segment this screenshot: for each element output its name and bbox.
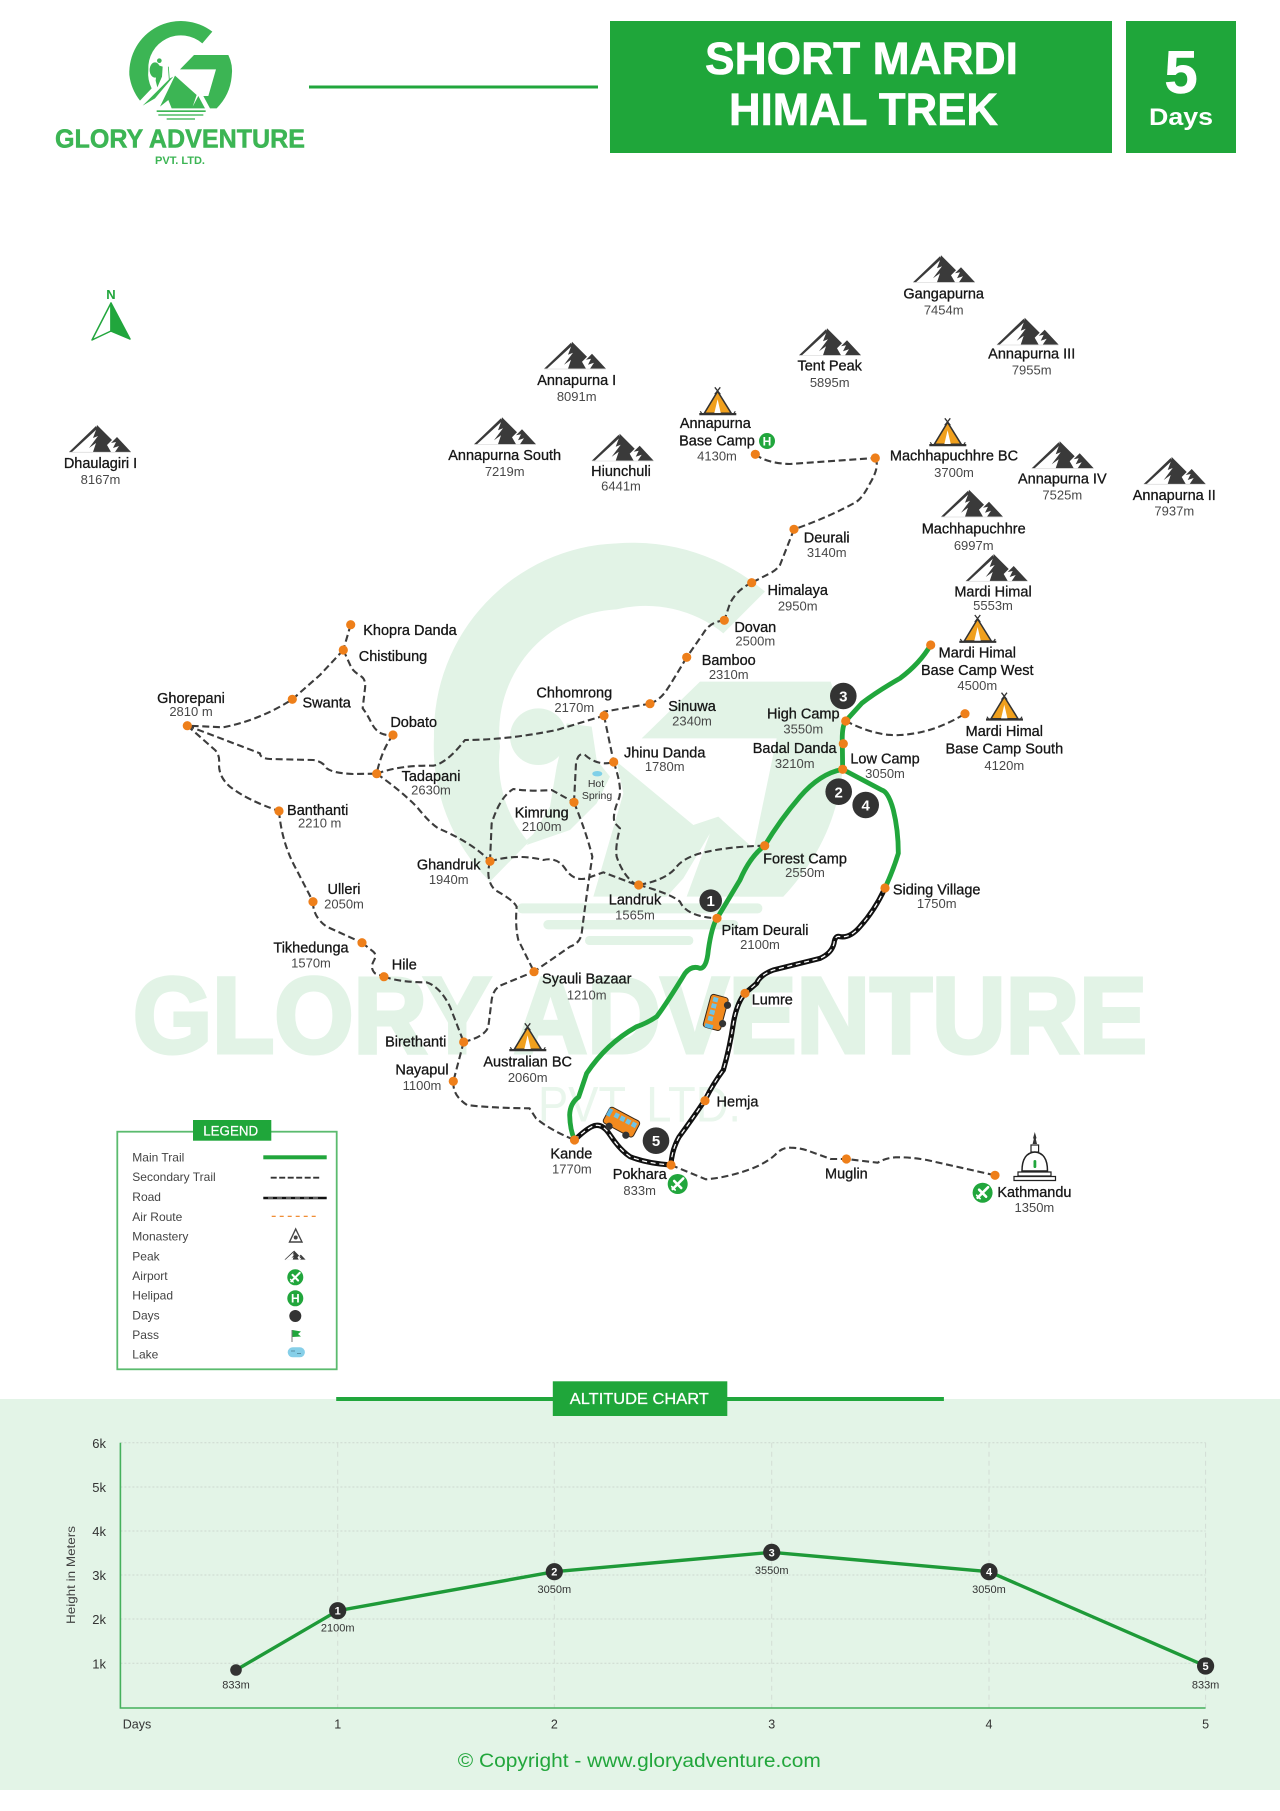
- label: Banthanti: [287, 803, 348, 830]
- camp: Mardi Himal Base Camp West: 4500m: [957, 678, 997, 693]
- legend: secondary trail: Secondary Trail: [132, 1170, 216, 1184]
- day marker 2: [825, 778, 852, 805]
- label: Kathmandu: Kathmandu: [997, 1185, 1071, 1201]
- label: Landruk: Landruk: [609, 892, 662, 908]
- label: Bamboo: [702, 653, 756, 682]
- day marker 5: [643, 1127, 669, 1154]
- chart point day 3: [755, 1544, 789, 1577]
- peak: Annapurna II: [1133, 457, 1216, 518]
- label: Pitam Deurali: Pitam Deurali: [721, 923, 809, 939]
- legend: airport: [132, 1269, 303, 1285]
- legend: road: Road: [132, 1190, 161, 1204]
- legend: main trail: Main Trail: [132, 1150, 184, 1164]
- chart point day 3: 3: [769, 1547, 775, 1559]
- label: Kimrung: Kimrung: [515, 806, 569, 822]
- camp: Mardi Himal Base Camp West: Mardi Himal: [939, 646, 1016, 662]
- icon: stupa Kathmandu: [1014, 1132, 1056, 1180]
- day marker 5: 5: [652, 1133, 660, 1150]
- peak: Tent Peak: [797, 328, 863, 390]
- label: Chhomrong: 2170m: [554, 700, 594, 715]
- legend: pass: [132, 1328, 301, 1342]
- day marker 3: 3: [839, 688, 847, 706]
- watermark: G logo: [434, 543, 843, 945]
- y axis labels: 5k: [92, 1480, 106, 1495]
- camp: Annapurna Base Camp: [679, 387, 755, 464]
- days panel: Days: [1149, 104, 1213, 131]
- label: Ghandruk: 1940m: [429, 872, 469, 887]
- label: Landruk: 1565m: [615, 908, 655, 922]
- peak: Annapurna II: Annapurna II: [1133, 488, 1216, 504]
- camp: Machhapuchhre BC: [890, 418, 1018, 480]
- label: Dovan: Dovan: [734, 620, 776, 636]
- peak: Dhaulagiri I: [64, 425, 137, 487]
- peak: Gangapurna: 7454m: [924, 302, 964, 318]
- label: Bamboo: 2310m: [709, 667, 749, 682]
- logo: Glory Adventure: [55, 21, 305, 167]
- legend: lake: Lake: [132, 1348, 159, 1362]
- camp: Mardi Himal Base Camp West: [921, 615, 1034, 693]
- chart point day 2: 3050m: [537, 1584, 571, 1596]
- label: Forest Camp: Forest Camp: [763, 851, 847, 867]
- watermark: pvt ltd: PVT. LTD.: [538, 1077, 741, 1133]
- icon: airport Pokhara: [668, 1174, 688, 1194]
- camp: Australian BC: 2060m: [508, 1070, 548, 1085]
- camp: Annapurna Base Camp: Base Camp: [679, 433, 755, 449]
- label: Syauli Bazaar: Syauli Bazaar: [542, 971, 632, 987]
- peak: Annapurna I: 8091m: [557, 389, 597, 404]
- legend: helipad: H: [291, 1292, 300, 1306]
- label: Hot Spring: Spring: [582, 790, 612, 802]
- secondary trails Annapurna Base Camp: [724, 454, 877, 620]
- label: Sinuwa: Sinuwa: [668, 699, 717, 715]
- peak: Annapurna South: [448, 417, 561, 479]
- label: Muglin: Muglin: [825, 1167, 868, 1183]
- label: Deurali: 3140m: [807, 545, 847, 560]
- altitude chart heading: [336, 1381, 944, 1416]
- label: Kathmandu: 1350m: [1015, 1200, 1054, 1215]
- label: Dobato: Dobato: [390, 715, 437, 731]
- road: [575, 888, 885, 1165]
- peak: Mardi Himal: Mardi Himal: [954, 585, 1032, 601]
- label: Low Camp: 3050m: [865, 766, 905, 781]
- label: Lumre: Lumre: [752, 993, 793, 1009]
- y axis labels: 2k: [92, 1612, 106, 1627]
- label: Ghorepani: [157, 691, 225, 719]
- peak: Annapurna III: [988, 318, 1075, 378]
- logo name: GLORY ADVENTURE: [55, 123, 305, 153]
- label: Sinuwa: 2340m: [672, 714, 712, 728]
- label: Deurali: Deurali: [804, 530, 850, 546]
- chart point start: [222, 1664, 250, 1691]
- peak: Gangapurna: Gangapurna: [903, 286, 985, 302]
- peak: Hiunchuli: 6441m: [601, 478, 641, 494]
- label: Low Camp: [850, 752, 920, 781]
- day marker 4: 4: [862, 798, 871, 814]
- secondary trails south and east: [453, 1082, 995, 1179]
- label: Dovan: 2500m: [735, 634, 775, 648]
- chart point day 5: 833m: [1192, 1679, 1219, 1691]
- camp: Annapurna Base Camp: 4130m: [697, 448, 737, 464]
- camp: Mardi Himal Base Camp West: Base Camp West: [921, 663, 1034, 679]
- main trail: [570, 645, 931, 1140]
- y axis labels: 6k: [92, 1436, 106, 1451]
- chart axes: [120, 1443, 1206, 1708]
- peak: Tent Peak: Tent Peak: [797, 359, 863, 375]
- label: Hot Spring: [582, 771, 612, 802]
- label: High Camp: 3550m: [783, 722, 823, 736]
- label: Tikhedunga: Tikhedunga: [273, 941, 350, 957]
- place labels: [157, 530, 1071, 1215]
- legend: helipad: [132, 1289, 303, 1306]
- route nodes: [183, 450, 1000, 1180]
- peak: Hiunchuli: [591, 434, 654, 494]
- label: Kande: Kande: [550, 1146, 592, 1162]
- y axis labels: 3k: [92, 1568, 106, 1583]
- label: Himalaya: Himalaya: [767, 583, 829, 599]
- label: High Camp: High Camp: [767, 706, 840, 722]
- chart point day 2: [537, 1563, 571, 1596]
- altitude chart: [64, 1436, 1219, 1732]
- peak: Annapurna I: Annapurna I: [537, 373, 616, 389]
- altitude panel background: [0, 1399, 1280, 1790]
- label: Banthanti: 2210 m: [298, 816, 341, 830]
- label: Forest Camp: 2550m: [785, 865, 825, 880]
- icon: bus near Lumre: [703, 994, 733, 1032]
- label: Kathmandu: [997, 1185, 1071, 1215]
- label: High Camp: [767, 706, 840, 736]
- chart point start: 833m: [222, 1679, 250, 1691]
- label: Badal Danda: [753, 741, 838, 771]
- y axis labels: 1k: [92, 1656, 106, 1672]
- legend: days: Days: [132, 1308, 160, 1322]
- label: Ghandruk: Ghandruk: [417, 857, 481, 873]
- label: Forest Camp: [763, 851, 847, 880]
- day marker 3: [830, 683, 857, 709]
- label: Pokhara: 833m: [623, 1183, 656, 1198]
- chart point day 1: 1: [335, 1606, 341, 1618]
- legend: peak: [132, 1249, 306, 1263]
- copyright: © Copyright - www.gloryadventure.com: [458, 1751, 821, 1772]
- label: Landruk: [609, 892, 662, 922]
- chart point day 4: [972, 1563, 1006, 1596]
- x axis labels: Days: [123, 1718, 151, 1732]
- label: Deurali: [804, 530, 850, 560]
- legend panel: [117, 1120, 337, 1369]
- altitude line: [236, 1552, 1206, 1670]
- label: Banthanti: Banthanti: [287, 803, 348, 819]
- peak: Hiunchuli: Hiunchuli: [591, 464, 651, 480]
- x axis labels: [123, 1718, 1209, 1732]
- label: Syauli Bazaar: 1210m: [567, 988, 607, 1002]
- camp: Mardi Himal Base Camp South: Base Camp South: [945, 742, 1063, 758]
- icon: airport Kathmandu: [973, 1183, 993, 1203]
- legend: airport: Airport: [132, 1269, 168, 1283]
- peak: Dhaulagiri I: Dhaulagiri I: [64, 456, 137, 472]
- label: Chhomrong: [536, 686, 612, 715]
- label: Tadapani: [402, 769, 460, 798]
- label: Khopra Danda: Khopra Danda: [363, 623, 458, 639]
- legend: peak: Peak: [132, 1249, 161, 1263]
- peak: Annapurna IV: 7525m: [1042, 488, 1082, 502]
- chart point day 1: [321, 1602, 355, 1635]
- label: Pitam Deurali: 2100m: [740, 937, 780, 952]
- chart point day 4: 4: [986, 1567, 993, 1579]
- day marker 2: 2: [835, 784, 843, 802]
- x axis labels: 3: [768, 1718, 775, 1732]
- title panel: HIMAL TREK: [729, 84, 998, 135]
- camp: Machhapuchhre BC: Machhapuchhre BC: [890, 448, 1018, 464]
- chart point day 5: 5: [1203, 1661, 1209, 1673]
- chart point day 4: 3050m: [972, 1584, 1006, 1596]
- title panel: SHORT MARDI: [705, 33, 1018, 84]
- label: Chhomrong: Chhomrong: [536, 686, 612, 702]
- peak: Annapurna IV: Annapurna IV: [1018, 472, 1107, 488]
- legend title: LEGEND: [203, 1124, 258, 1138]
- legend: helipad: Helipad: [132, 1289, 173, 1303]
- label: Kande: 1770m: [552, 1162, 592, 1176]
- peak: Annapurna South: 7219m: [485, 464, 525, 479]
- camp: Mardi Himal Base Camp South: [945, 693, 1063, 773]
- peak: Annapurna IV: [1018, 441, 1107, 502]
- label: Ghorepani: Ghorepani: [157, 691, 225, 707]
- peak: Mardi Himal: [954, 554, 1032, 613]
- y axis labels: [92, 1436, 106, 1672]
- label: Pitam Deurali: [721, 923, 809, 952]
- label: Jhinu Danda: Jhinu Danda: [624, 746, 706, 762]
- label: Birethanti: Birethanti: [385, 1034, 446, 1050]
- peak: Annapurna II: 7937m: [1154, 504, 1194, 518]
- icon: helipad at Annapurna Base Camp: H: [763, 434, 771, 448]
- secondary trails west: [187, 625, 637, 1081]
- chart point day 2: 2: [551, 1567, 557, 1579]
- legend: monastery: [132, 1229, 302, 1244]
- peak: Machhapuchhre: 6997m: [954, 538, 994, 553]
- label: Siding Village: Siding Village: [893, 883, 981, 899]
- day marker 1: [699, 889, 722, 912]
- label: Chistibung: Chistibung: [359, 649, 427, 665]
- legend: days: [132, 1308, 301, 1322]
- header connector line: [309, 86, 598, 88]
- label: Swanta: Swanta: [303, 696, 352, 712]
- camp: Australian BC: Australian BC: [483, 1055, 572, 1071]
- label: Siding Village: [893, 883, 981, 911]
- icon: north arrow: [92, 287, 130, 340]
- secondary trails north and Forest Camp links: [604, 620, 965, 918]
- logo icon: [129, 21, 232, 120]
- peak: Tent Peak: 5895m: [810, 375, 850, 390]
- label: Kimrung: [515, 806, 569, 834]
- chart point day 5: [1192, 1657, 1219, 1691]
- day marker 1: 1: [707, 893, 715, 910]
- label: Bamboo: Bamboo: [702, 653, 756, 669]
- chart point day 1: 2100m: [321, 1623, 355, 1635]
- label: Badal Danda: 3210m: [775, 756, 815, 771]
- peak: Annapurna I: [537, 342, 616, 404]
- label: Hot Spring: Hot: [588, 778, 604, 790]
- icon: helipad at Annapurna Base Camp: [759, 433, 775, 449]
- label: Nayapul: [395, 1063, 449, 1093]
- legend: monastery: Monastery: [132, 1230, 188, 1244]
- label: Tadapani: 2630m: [411, 782, 451, 798]
- peak: Annapurna III: 7955m: [1012, 362, 1052, 378]
- icon: north arrow: N: [106, 287, 116, 302]
- x axis labels: 1: [334, 1718, 341, 1732]
- label: Pokhara: [613, 1167, 668, 1198]
- camp: Mardi Himal Base Camp South: Mardi Himal: [966, 724, 1043, 740]
- legend: pass: Pass: [132, 1328, 159, 1342]
- label: Tadapani: Tadapani: [402, 769, 460, 785]
- legend title: [193, 1120, 271, 1141]
- label: Low Camp: Low Camp: [850, 752, 920, 768]
- label: Sinuwa: [668, 699, 717, 728]
- label: Syauli Bazaar: [542, 971, 632, 1002]
- label: Badal Danda: Badal Danda: [753, 741, 838, 757]
- legend: main trail: [132, 1150, 327, 1164]
- peak: Machhapuchhre: Machhapuchhre: [922, 522, 1026, 538]
- y axis title: Height in Meters: [64, 1526, 78, 1624]
- label: Ulleri: Ulleri: [327, 882, 361, 898]
- label: Ghorepani: 2810 m: [169, 704, 213, 719]
- label: Ghandruk: [417, 857, 481, 887]
- camp: Mardi Himal Base Camp South: 4120m: [984, 758, 1024, 773]
- peak: Annapurna III: Annapurna III: [988, 346, 1075, 362]
- legend: lake: [132, 1347, 305, 1362]
- label: Pokhara: Pokhara: [613, 1167, 668, 1183]
- label: Hemja: Hemja: [717, 1095, 759, 1111]
- x axis labels: 4: [986, 1718, 993, 1732]
- label: Dovan: [734, 620, 776, 648]
- peak: Dhaulagiri I: 8167m: [81, 472, 120, 487]
- title panel: [610, 21, 1112, 153]
- peak: Annapurna South: Annapurna South: [448, 448, 561, 464]
- x axis labels: 5: [1202, 1718, 1209, 1732]
- peak: Mardi Himal: 5553m: [973, 598, 1013, 613]
- day marker 4: [852, 792, 879, 818]
- label: Himalaya: 2950m: [778, 598, 818, 614]
- peak: Gangapurna: [903, 255, 985, 318]
- camp: Machhapuchhre BC: 3700m: [934, 465, 974, 480]
- label: Ulleri: 2050m: [324, 896, 364, 912]
- peak: Machhapuchhre: [922, 490, 1026, 553]
- label: Nayapul: 1100m: [403, 1078, 441, 1093]
- label: Kimrung: 2100m: [522, 819, 562, 834]
- label: Tikhedunga: 1570m: [291, 956, 331, 970]
- label: Hile: Hile: [392, 957, 417, 973]
- altitude chart heading: ALTITUDE CHART: [570, 1391, 709, 1408]
- x axis labels: 2: [551, 1718, 558, 1732]
- logo subtitle: PVT. LTD.: [155, 155, 205, 167]
- label: Ulleri: [324, 882, 364, 912]
- camp: Annapurna Base Camp: Annapurna: [680, 416, 752, 432]
- watermark: company name: GLORY ADVENTURE: [133, 954, 1147, 1076]
- label: Nayapul: Nayapul: [395, 1063, 449, 1079]
- label: Jhinu Danda: 1780m: [645, 759, 685, 774]
- label: Jhinu Danda: [624, 746, 706, 774]
- label: Kande: [550, 1146, 592, 1176]
- legend: air route: Air Route: [132, 1210, 183, 1224]
- icon: bus near Pokhara: [600, 1106, 641, 1142]
- chart point day 3: 3550m: [755, 1565, 789, 1577]
- label: Tikhedunga: [273, 941, 350, 970]
- y axis labels: 4k: [92, 1524, 106, 1539]
- days panel: [1126, 21, 1236, 153]
- label: Siding Village: 1750m: [917, 896, 957, 911]
- label: Himalaya: [767, 583, 829, 614]
- camp: Australian BC: [483, 1023, 572, 1085]
- days panel: 5: [1164, 39, 1198, 106]
